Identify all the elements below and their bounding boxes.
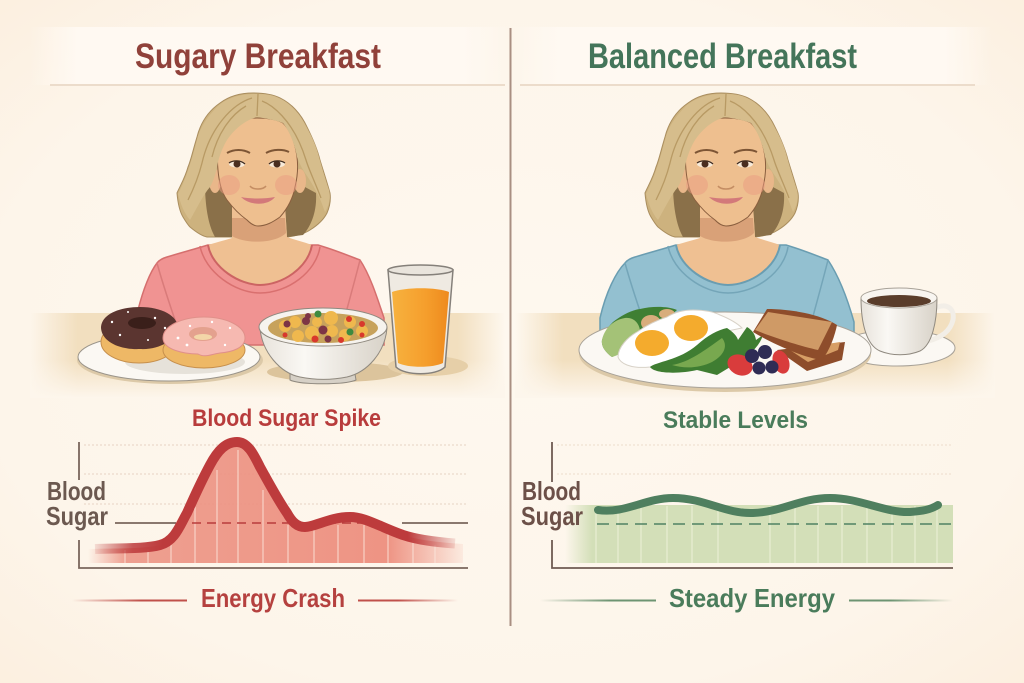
axes	[552, 442, 953, 568]
area fill	[565, 505, 953, 563]
heading: stable levels: Stable Levels	[663, 407, 808, 434]
chart: blood sugar spike	[46, 442, 468, 568]
toast	[753, 309, 845, 371]
eyebrows	[227, 150, 289, 153]
bowl of cereal	[259, 308, 403, 384]
heading: blood sugar spike: Blood Sugar Spike	[192, 405, 381, 432]
woman in pink shirt	[138, 93, 384, 345]
chart: blood sugar spike: Sugar	[46, 501, 108, 531]
mouth	[709, 197, 743, 204]
hair shadow sides	[673, 178, 700, 237]
area fill	[88, 442, 463, 563]
shirt	[600, 245, 854, 345]
large plate	[579, 316, 871, 392]
neck and chest	[208, 205, 312, 285]
center divider	[510, 28, 512, 626]
fried eggs	[618, 310, 742, 367]
table: right	[515, 313, 995, 398]
hair back	[177, 93, 330, 237]
eyebrows	[695, 150, 757, 153]
neck and chest	[676, 205, 780, 285]
collar	[668, 246, 788, 293]
mouth	[241, 197, 275, 204]
chocolate donut	[101, 321, 177, 363]
chart: stable levels	[521, 442, 953, 568]
header: sugary breakfast	[30, 27, 510, 86]
pink donut	[163, 332, 245, 368]
hair back	[645, 93, 798, 237]
ears	[209, 169, 221, 193]
glass of orange juice	[388, 265, 468, 376]
axes	[79, 442, 468, 568]
y-axis label: Blood	[47, 476, 106, 506]
header: balanced breakfast	[512, 27, 992, 86]
hair front	[178, 94, 330, 220]
curve	[95, 442, 455, 549]
coffee cup and saucer	[839, 288, 955, 366]
eyes	[697, 160, 753, 168]
title: balanced: Balanced Breakfast	[588, 37, 857, 76]
nose	[250, 186, 266, 189]
caption: energy crash: Energy Crash	[201, 583, 345, 613]
chart: stable levels: Sugar	[521, 501, 583, 531]
curve	[598, 498, 938, 513]
food: sugary breakfast	[77, 265, 468, 384]
food: balanced breakfast	[579, 288, 955, 392]
face	[217, 118, 298, 226]
face	[685, 118, 766, 226]
baseline	[115, 522, 468, 524]
hair front	[646, 94, 798, 220]
y-axis label: Blood	[522, 476, 581, 506]
nose	[718, 186, 734, 189]
shirt	[138, 245, 384, 345]
table: left	[30, 313, 505, 398]
avocado	[602, 307, 677, 357]
eyes	[229, 160, 285, 168]
greens	[650, 327, 763, 375]
baseline	[597, 523, 953, 525]
plate with donuts	[77, 307, 263, 384]
berries and tomatoes	[724, 345, 793, 380]
ears	[677, 169, 689, 193]
caption: steady energy: Steady Energy	[669, 583, 835, 613]
hair shadow sides	[205, 178, 232, 237]
title: sugary: Sugary Breakfast	[135, 37, 381, 76]
collar	[200, 246, 320, 293]
woman in blue shirt	[600, 93, 854, 345]
